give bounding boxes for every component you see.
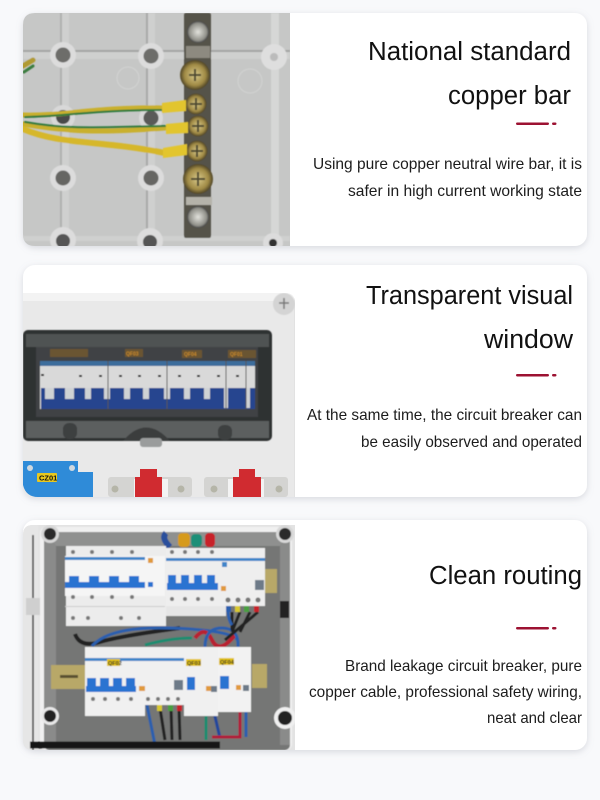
socket: red left [108,469,192,497]
heading: visual window: Transparent visual [366,282,573,310]
text block: copper bar [313,156,582,200]
text block: copper bar: Using pure copper neutral wire bar, it is [313,156,582,173]
breakers: bottom middle: QF03 [187,661,201,667]
din rail [51,569,277,689]
text block: visual window: At the same time, the circuit breaker can [307,407,582,424]
icon: corner screw [273,293,295,315]
accent mark [516,374,556,376]
breakers: bottom left: QF02 [108,661,122,667]
window latch [63,423,232,447]
label strip: QF01 [230,352,243,358]
text block: clean routing: neat and clear [487,710,582,727]
terminals: top right [226,606,259,612]
text block: clean routing: copper cable, professional safety wiring, [309,684,582,701]
accent mark [516,122,556,125]
label strip [50,349,256,358]
label strip: QF03 [126,352,139,358]
icon: wire lugs [162,100,188,158]
cable terminals: top [164,533,215,547]
text block: copper bar: safer in high current working state [348,183,582,200]
text block: visual window: be easily observed and operated [361,434,582,451]
heading: copper bar: copper bar [448,82,572,110]
socket: red right [204,469,288,497]
heading: visual window: window [483,326,574,354]
enclosure interior [40,525,296,750]
photo: copper bar [23,13,290,254]
panel: visual window [23,265,587,497]
text block: clean routing [309,658,582,727]
circuit breakers [40,361,255,409]
breakers: top right [166,548,265,616]
breakers: top left [65,546,166,626]
breakers: bottom right: QF04 [220,660,235,666]
icon: yellow-green wires [23,60,165,153]
heading: clean routing: Clean routing [429,562,582,590]
icon: copper bar strip [180,13,213,238]
panel: clean routing [23,520,587,750]
accent mark [516,627,556,630]
transparent window [23,330,272,447]
heading: visual window [366,282,574,354]
socket: blue: CZ01 [39,474,57,482]
socket: blue [23,461,93,497]
breakers: bottom left [85,647,184,716]
photo: visual window [23,293,295,497]
heading: copper bar: National standard [368,38,571,66]
photo: clean routing [23,525,296,750]
text block: visual window [307,407,582,451]
breakers: bottom middle [184,647,218,716]
text block: clean routing: Brand leakage circuit breaker, pure [345,658,582,675]
heading: copper bar [368,38,572,110]
breakers: bottom right [218,647,251,712]
terminal sleeves: bottom [157,705,182,711]
label strip: QF04 [184,352,197,358]
cables [30,608,258,745]
panel: copper bar [23,13,587,254]
enclosure door [26,534,40,750]
